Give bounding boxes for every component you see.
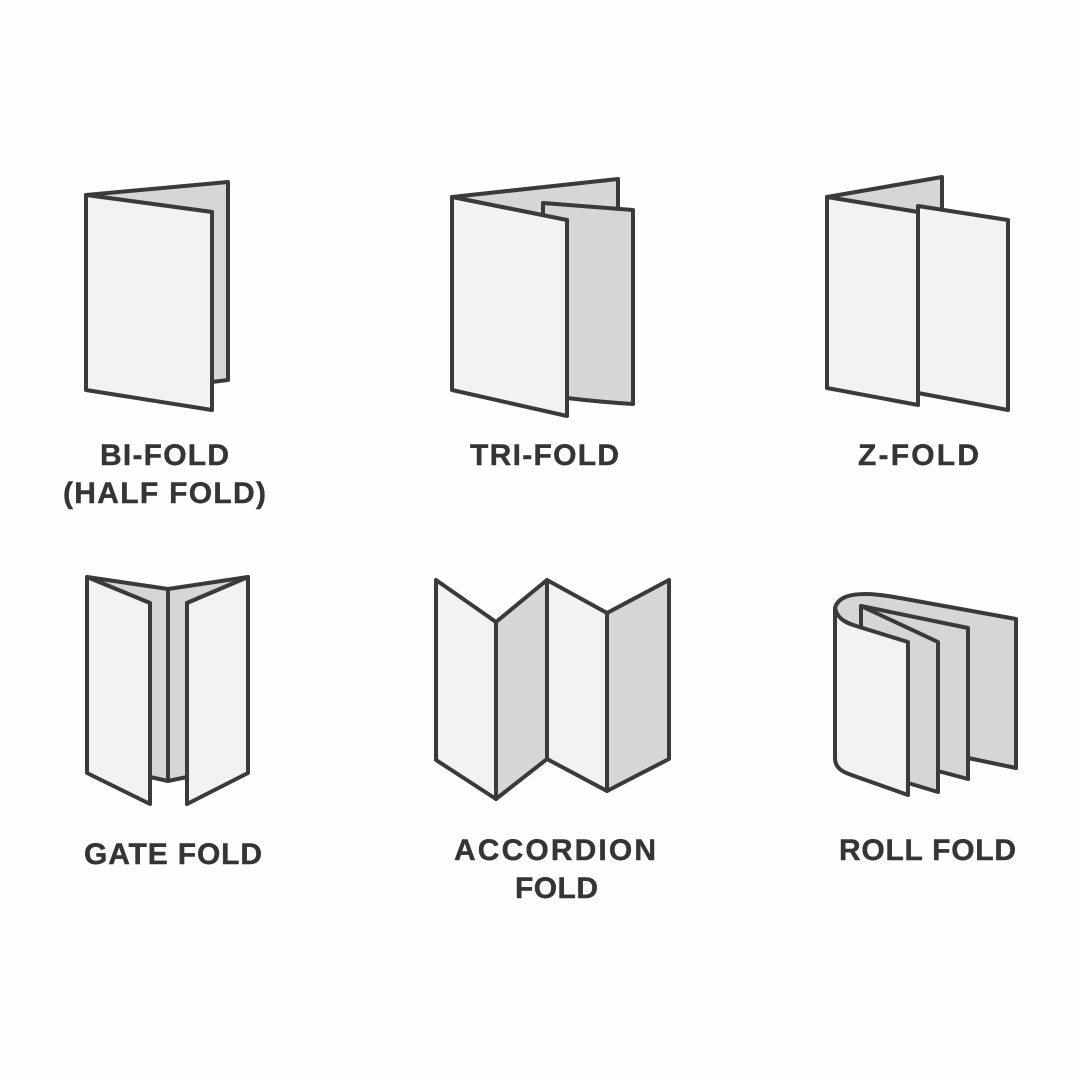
icon: gate fold bbox=[87, 577, 248, 804]
icon: tri-fold bbox=[452, 179, 633, 416]
label: roll fold: ROLL FOLD bbox=[839, 834, 1016, 867]
label: gate fold: GATE FOLD bbox=[84, 838, 262, 871]
label: accordion fold bbox=[454, 834, 656, 905]
label: z-fold: Z-FOLD bbox=[858, 439, 979, 472]
label: accordion fold: FOLD bbox=[515, 872, 598, 905]
label: bi-fold: BI-FOLD bbox=[100, 439, 229, 472]
icon: accordion fold bbox=[436, 580, 669, 799]
icon: z-fold bbox=[827, 177, 1008, 410]
label: accordion fold: ACCORDION bbox=[454, 834, 656, 867]
label: tri-fold: TRI-FOLD bbox=[470, 439, 619, 472]
icon: bi-fold bbox=[86, 182, 228, 410]
icon: roll fold bbox=[835, 594, 1016, 795]
label: bi-fold: (HALF FOLD) bbox=[63, 477, 266, 510]
label: bi-fold bbox=[63, 439, 266, 510]
